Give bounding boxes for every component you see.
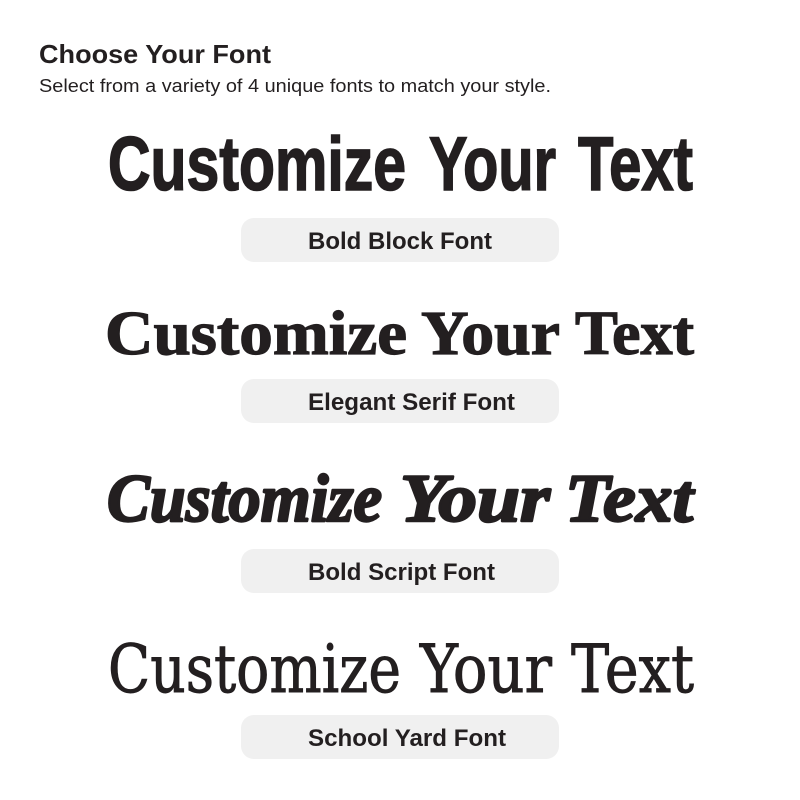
sample: bold script font: Text: [565, 460, 695, 536]
label pill: school yard font: [241, 715, 559, 759]
sample: elegant serif font: [105, 300, 694, 368]
sample: bold script font: [107, 460, 695, 536]
sample: elegant serif font: Text: [575, 300, 694, 368]
sample: bold block font: Customize: [108, 122, 406, 207]
label pill: bold script font: Bold Script Font: [308, 559, 495, 586]
label pill: school yard font: School Yard Font: [308, 725, 506, 752]
sample: bold block font: Text: [578, 122, 693, 207]
label pill: elegant serif font: [241, 379, 559, 423]
label pill: bold block font: Bold Block Font: [308, 228, 492, 255]
sample: bold block font: Your: [429, 122, 556, 207]
sample: school yard font: Customize: [108, 631, 401, 708]
label pill: bold block font: [241, 218, 559, 262]
subtitle: Select from a variety of 4 unique fonts to match your style.: [39, 76, 551, 96]
label pill: elegant serif font: Elegant Serif Font: [308, 389, 515, 416]
sample: bold script font: Customize: [107, 460, 382, 536]
sample: school yard font: Your: [419, 631, 552, 708]
title: Choose Your Font: [39, 39, 271, 69]
sample: school yard font: Text: [571, 631, 694, 708]
sample: elegant serif font: Your: [421, 300, 560, 368]
sample: bold script font: Your: [400, 460, 551, 536]
label pill: bold script font: [241, 549, 559, 593]
sample: elegant serif font: Customize: [105, 300, 407, 368]
sample: school yard font: [108, 631, 694, 708]
sample: bold block font: [108, 122, 693, 207]
